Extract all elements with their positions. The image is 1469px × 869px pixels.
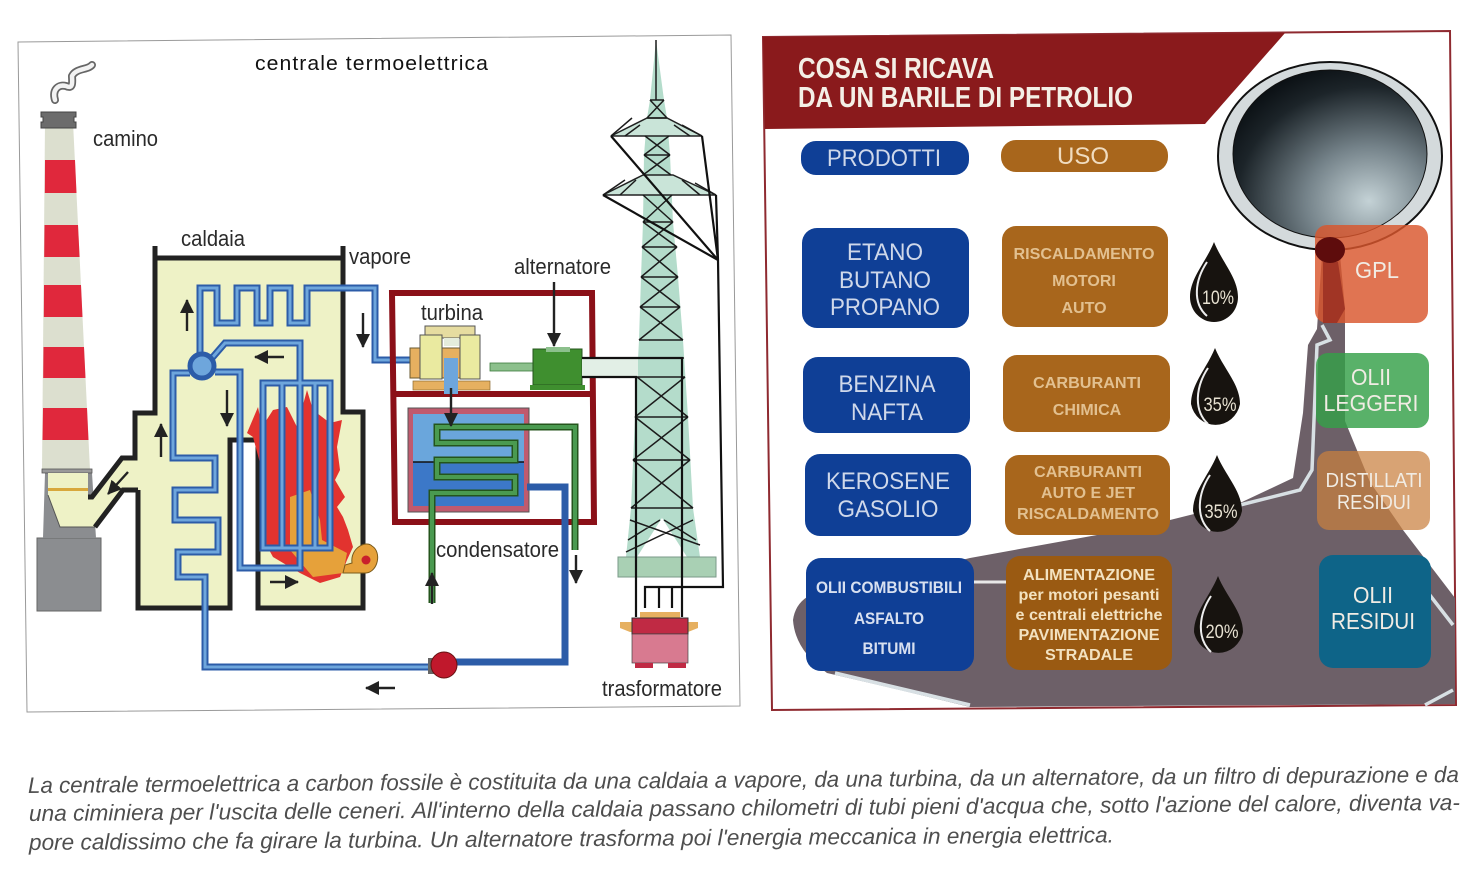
row 1 product: [802, 228, 969, 328]
legend pill: USO: USO: [1057, 143, 1109, 170]
label: caldaia: caldaia: [181, 226, 246, 251]
product box: DISTILLATI RESIDUI: RESIDUI: [1337, 492, 1411, 514]
label: alternatore: alternatore: [514, 254, 611, 279]
drop 35%: 35%: [1204, 502, 1238, 523]
row 3 use: [1005, 455, 1170, 535]
heading: DA UN BARILE DI PETROLIO: [798, 82, 1133, 114]
flow arrows: [108, 282, 576, 688]
row 2 use: CHIMICA: [1053, 402, 1122, 419]
drop 35%: [1193, 455, 1242, 532]
row 2 use: CARBURANTI: [1033, 375, 1141, 392]
barrel opening: [1218, 62, 1442, 250]
product box: OLII RESIDUI: OLII: [1353, 582, 1393, 608]
caption text: pore caldissimo che fa girare la turbina. Un alternatore trasforma poi l'energia meccanica in energia elettrica.: [28, 822, 1114, 855]
legend pill: PRODOTTI: PRODOTTI: [827, 145, 941, 172]
row 3 product: KEROSENE: [826, 468, 950, 495]
product box: OLII LEGGERI: OLII: [1351, 364, 1391, 390]
row 2 product: NAFTA: [851, 399, 923, 426]
product box: DISTILLATI RESIDUI: DISTILLATI: [1326, 470, 1422, 492]
row 2 use: [1003, 355, 1170, 432]
alternator: [490, 347, 585, 390]
row 1 product: ETANO: [847, 239, 923, 266]
row 3 product: [805, 454, 971, 536]
product box: GPL: [1315, 225, 1428, 323]
row 3 use: AUTO E JET: [1041, 485, 1135, 502]
boiler casing: [48, 246, 363, 608]
icon: burner: [343, 544, 378, 573]
steam and water pipes in boiler: [173, 288, 430, 667]
legend pill: PRODOTTI: [801, 141, 969, 175]
label: trasformatore: trasformatore: [602, 676, 722, 701]
condenser: [408, 408, 575, 603]
caption text: una ciminiera per l'uscita delle ceneri. All'interno della caldaia passano chilometri di tubi pieni d'acqua che, sotto l'azione del calore, diventa va-: [29, 790, 1460, 826]
row 1 use: AUTO: [1061, 300, 1107, 317]
oil pool and stream: [793, 255, 1455, 707]
row 4 use: PAVIMENTAZIONE: [1018, 627, 1160, 644]
row 1 use: [1002, 226, 1168, 327]
turbine: [410, 326, 490, 394]
row 2 product: [803, 357, 970, 433]
row 4 use: STRADALE: [1045, 647, 1133, 664]
row 3 product: GASOLIO: [838, 496, 938, 523]
pump: [428, 652, 457, 678]
product box: OLII LEGGERI: LEGGERI: [1324, 390, 1418, 416]
panel frame: [763, 31, 1456, 710]
product box: OLII LEGGERI: [1316, 353, 1429, 428]
stream highlight: [835, 325, 1453, 705]
row 2 product: BENZINA: [838, 371, 936, 398]
chimney: [37, 112, 101, 611]
row 1 product: BUTANO: [839, 267, 931, 294]
drop 35%: [1191, 348, 1240, 425]
row 4 connector: [974, 580, 1006, 584]
product box: OLII RESIDUI: RESIDUI: [1331, 608, 1415, 634]
row 1 use: MOTORI: [1052, 273, 1116, 290]
transformer: [620, 612, 698, 668]
row 4 use: [1006, 556, 1172, 670]
flames: [247, 390, 353, 583]
icon: smoke: [54, 65, 92, 100]
label: vapore: vapore: [349, 244, 411, 269]
title: centrale termoelettrica: centrale termoelettrica: [255, 53, 489, 75]
heading: [798, 53, 1133, 114]
drop 10%: [1190, 242, 1238, 322]
panel: power plant diagram: [18, 35, 740, 712]
panel frame: [18, 35, 740, 712]
row 3 use: RISCALDAMENTO: [1017, 506, 1159, 523]
heading: COSA SI RICAVA: [798, 53, 994, 85]
row 4 product: OLII COMBUSTIBILI: [816, 578, 962, 597]
product box: DISTILLATI RESIDUI: [1317, 451, 1430, 530]
boiler drum: [190, 354, 214, 378]
turbine and condenser enclosure: [392, 293, 594, 522]
label: turbina: turbina: [421, 300, 484, 325]
transmission tower: [582, 40, 723, 617]
label: camino: camino: [93, 126, 158, 151]
row 1 product: PROPANO: [830, 294, 940, 321]
row 4 product: ASFALTO: [854, 609, 924, 628]
product box: GPL: GPL: [1355, 257, 1399, 283]
header banner: [763, 33, 1285, 129]
drop 10%: 10%: [1202, 288, 1234, 309]
caption text: [28, 762, 1460, 855]
product box: OLII RESIDUI: [1319, 555, 1431, 668]
drop 20%: [1194, 576, 1243, 653]
drop 35%: 35%: [1204, 395, 1237, 416]
row 1 use: RISCALDAMENTO: [1014, 246, 1154, 263]
row 4 product: [806, 558, 974, 671]
caption text: La centrale termoelettrica a carbon fossile è costituita da una caldaia a vapore, da una turbina, da un alternatore, da un filtro di depurazione e da: [28, 762, 1459, 798]
return pipe: [443, 487, 565, 662]
label: condensatore: condensatore: [436, 537, 559, 562]
row 4 use: e centrali elettriche: [1016, 607, 1163, 624]
panel: oil barrel products: [763, 31, 1456, 710]
legend pill: USO: [1001, 140, 1168, 172]
row 3 use: CARBURANTI: [1034, 464, 1142, 481]
drop 20%: 20%: [1206, 622, 1239, 643]
row 4 product: BITUMI: [862, 639, 916, 658]
row 4 use: per motori pesanti: [1018, 587, 1160, 604]
row 4 use: ALIMENTAZIONE: [1023, 567, 1155, 584]
